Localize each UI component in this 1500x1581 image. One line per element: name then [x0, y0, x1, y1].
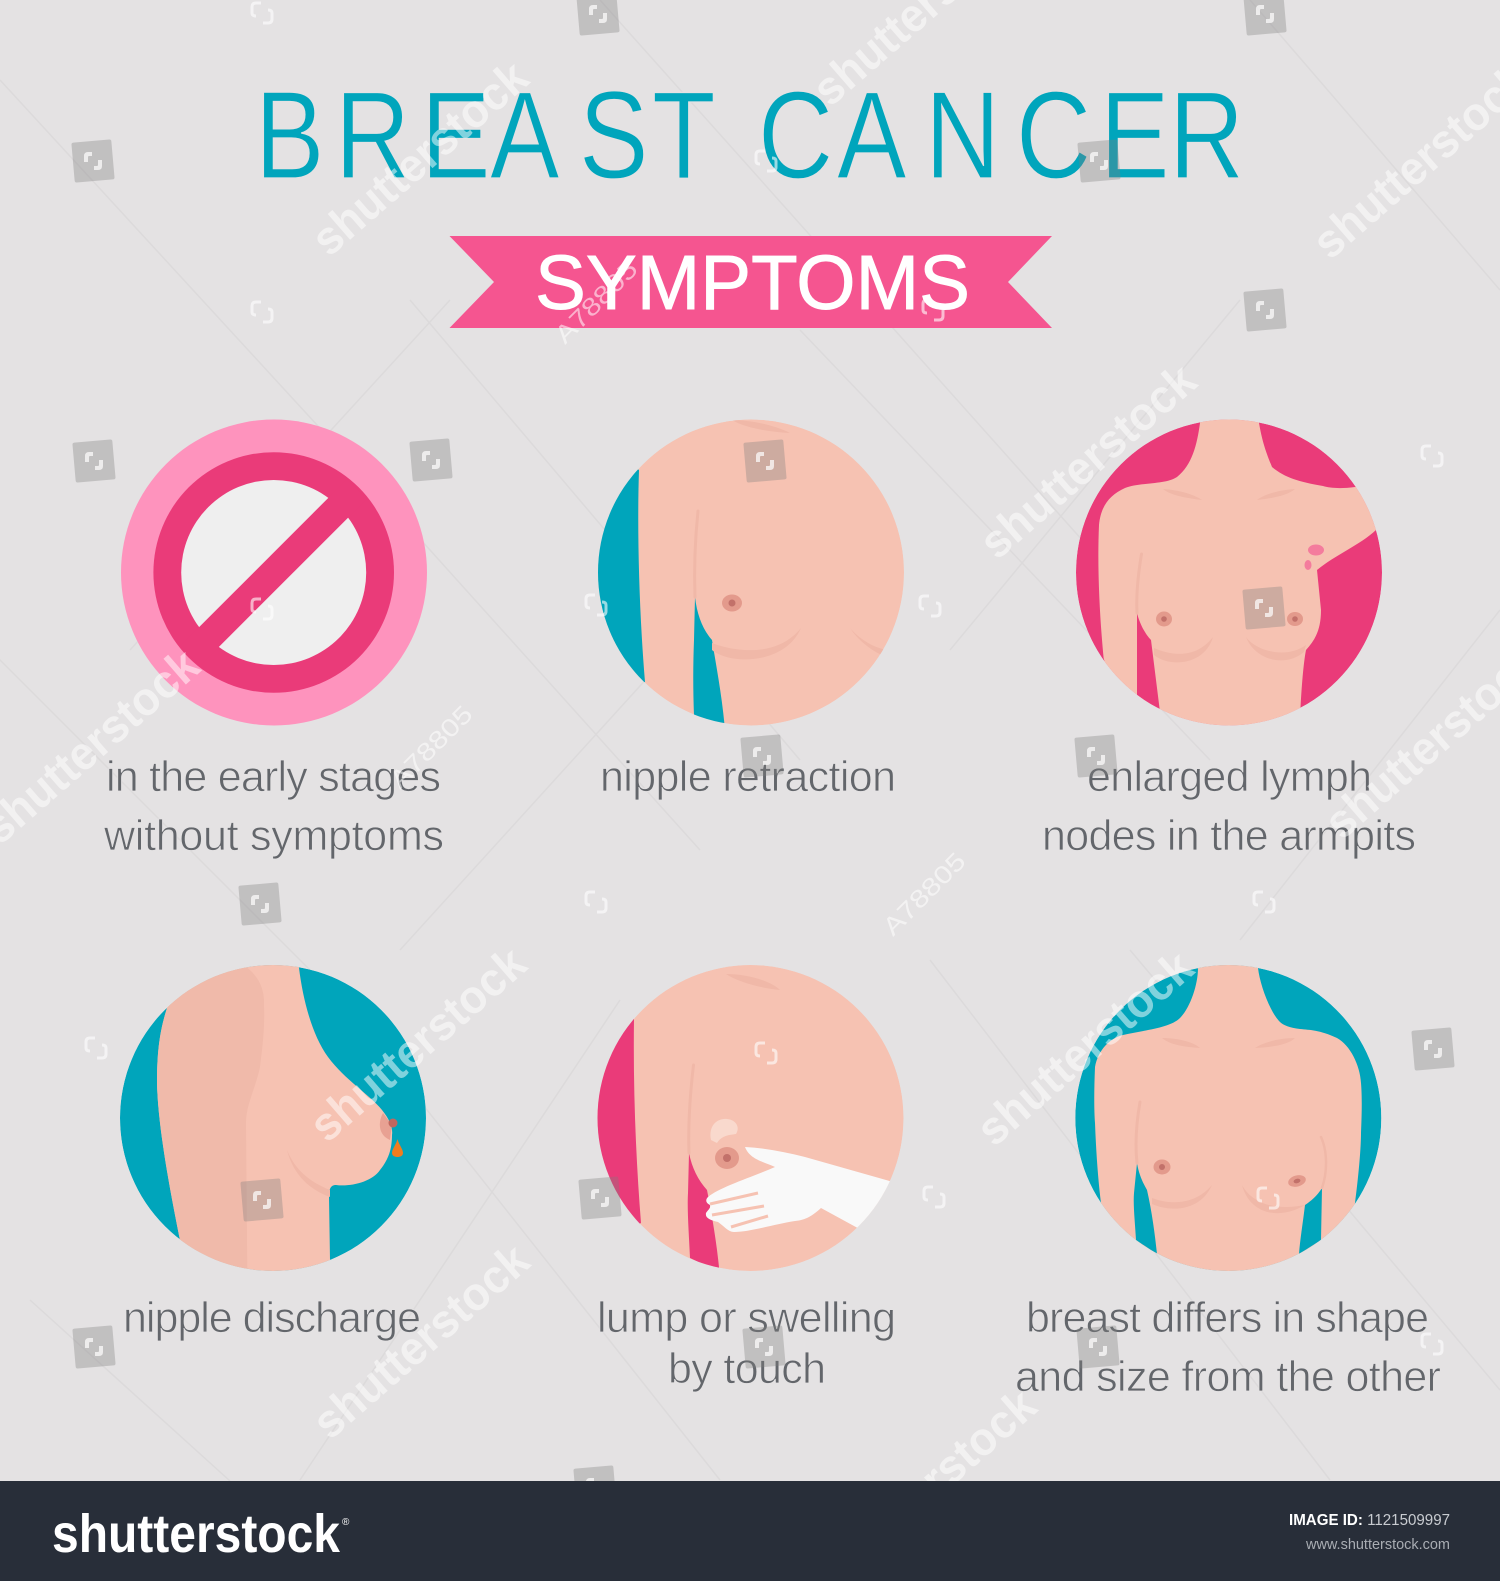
illustration: torso with raised arm: [1076, 410, 1390, 730]
label: enlarged lymph nodes: nodes in the armpits: [1042, 812, 1416, 860]
footer image id: IMAGE ID: 1121509997: [1289, 1512, 1450, 1529]
panel: nipple retraction: [590, 420, 904, 801]
panel: enlarged lymph nodes: [1042, 410, 1416, 860]
illustration: frontal torso, asymmetry: [1075, 955, 1381, 1280]
label: lump or swelling: by touch: [668, 1345, 826, 1393]
ribbon banner: symptoms: SYMPTOMS: [535, 240, 970, 326]
watermark wordmarks: A78805: [384, 700, 478, 794]
label: early stages: without symptoms: [103, 812, 444, 860]
watermark wordmarks: shutterstock: [299, 935, 536, 1152]
watermark wordmarks: shutterstock: [302, 1232, 539, 1449]
title: BREAST CANCER: [255, 66, 1244, 205]
watermark wordmarks: shutterstock: [966, 939, 1203, 1156]
label: nipple discharge: nipple discharge: [123, 1294, 421, 1342]
watermark small hooks: [86, 3, 1442, 1354]
illustration: side torso, retraction: [590, 420, 904, 730]
icon: prohibition sign: [121, 420, 427, 726]
watermark wordmarks: A78805: [877, 847, 971, 941]
watermark wordmarks: A78805: [549, 255, 643, 349]
illustration: hand examining breast: [590, 965, 904, 1272]
footer bar: [0, 1481, 1500, 1581]
label: differs in shape and size: breast differs in shape: [1026, 1294, 1429, 1342]
panel: nipple discharge: [120, 950, 426, 1342]
ribbon banner: symptoms: [450, 236, 1052, 328]
label: early stages: in the early stages: [106, 753, 441, 801]
panel: no symptoms: [103, 420, 444, 860]
watermark wordmarks: shutterstock: [969, 352, 1206, 569]
footer logo: shutterstock: [52, 1504, 341, 1564]
footer registered mark: ®: [342, 1517, 350, 1528]
label: differs in shape and size: and size from the other: [1015, 1353, 1441, 1401]
illustration: side profile with discharge: [120, 950, 426, 1285]
footer site url: www.shutterstock.com: [1305, 1536, 1450, 1553]
watermark wordmarks: shutterstock: [301, 49, 538, 266]
label: nipple retraction: nipple retraction: [600, 753, 896, 801]
panel: differing shape and size: [1015, 955, 1441, 1401]
label: enlarged lymph nodes: enlarged lymph: [1087, 753, 1372, 801]
label: lump or swelling: lump or swelling: [597, 1294, 896, 1342]
panel: lump or swelling: [590, 965, 904, 1393]
